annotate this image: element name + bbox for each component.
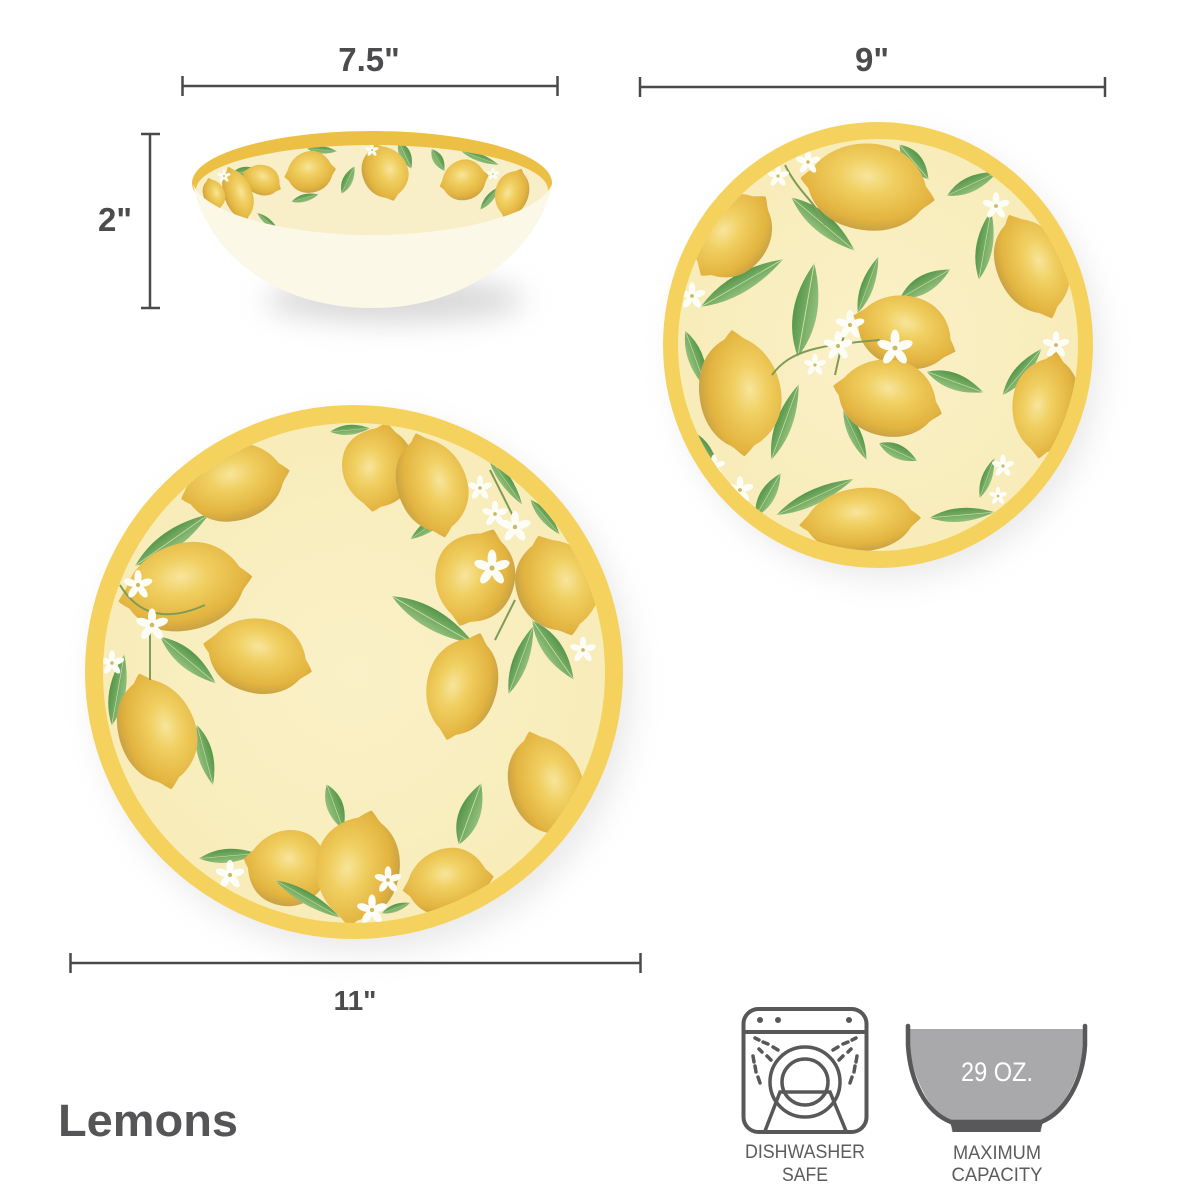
label: maximum capacity (952, 1143, 1043, 1186)
lemons on salad plate (696, 144, 1076, 551)
label: maximum capacity: MAXIMUM (953, 1143, 1041, 1164)
lemons on dinner plate (104, 416, 612, 934)
label: dishwasher safe (745, 1142, 865, 1186)
label: dishwasher safe: DISHWASHER (745, 1142, 865, 1163)
stems on dinner plate (120, 470, 520, 680)
dinner plate (85, 405, 632, 952)
dimension: bowl width 7.5 inches (182, 41, 558, 96)
leaves on salad plate (679, 139, 1046, 524)
dimension: bowl width 7.5 inches: 7.5" (338, 41, 400, 78)
title: Lemons: Lemons (58, 1095, 238, 1146)
label: maximum capacity: CAPACITY (952, 1165, 1043, 1186)
label: dishwasher safe: SAFE (782, 1165, 828, 1186)
salad plate (663, 122, 1100, 578)
stems on salad plate (772, 165, 880, 375)
dimension: plate width 9 inches: 9" (855, 41, 889, 78)
blossoms on salad plate (678, 149, 1070, 505)
icon: bowl capacity 29 oz: 29 OZ. (961, 1057, 1033, 1087)
dimension: dinner plate width 11 inches: 11" (334, 985, 376, 1016)
dimension: plate width 9 inches (640, 41, 1105, 97)
icon: dishwasher safe (743, 1009, 867, 1132)
icon: bowl capacity 29 oz (908, 1026, 1085, 1132)
leaves on dinner plate (103, 423, 582, 917)
dimension: dinner plate width 11 inches (70, 953, 640, 1016)
dimension: bowl height 2 inches: 2" (98, 201, 132, 238)
blossoms on dinner plate (99, 475, 597, 925)
bowl (192, 131, 552, 322)
leaf over lemon (276, 880, 340, 918)
dimension: bowl height 2 inches (98, 134, 160, 308)
